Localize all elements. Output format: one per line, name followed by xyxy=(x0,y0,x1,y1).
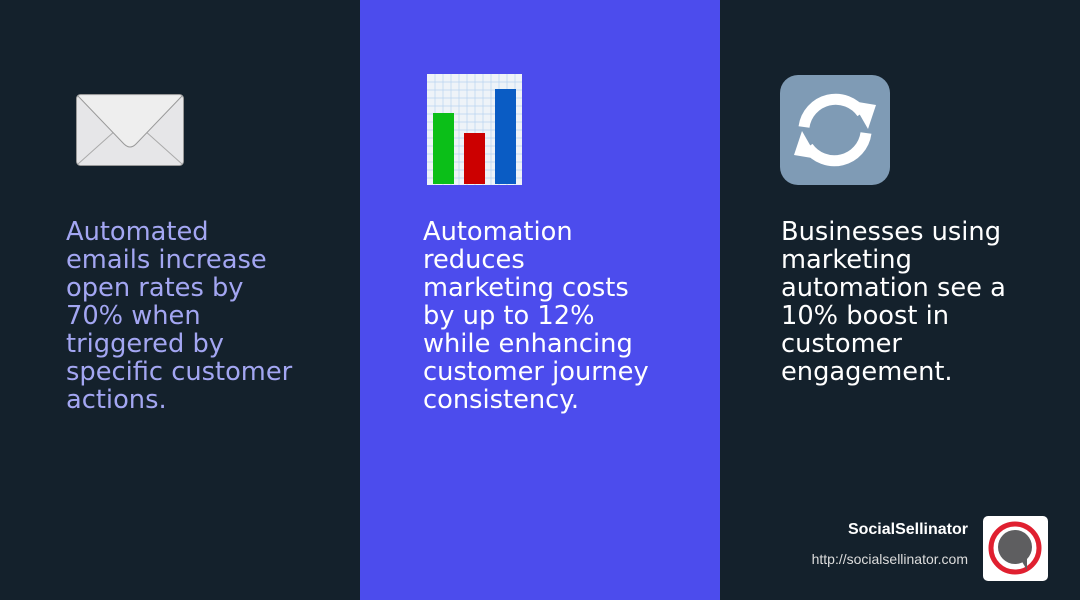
brand url: http://socialsellinator.com xyxy=(812,551,968,567)
brand name: SocialSellinator xyxy=(848,521,968,538)
text: email stat: Automated xyxy=(66,217,209,247)
text: email stat: open rates by xyxy=(66,273,244,303)
panel: reduces costs xyxy=(360,0,720,600)
text: email stat xyxy=(66,217,292,415)
icon: refresh arrows xyxy=(780,75,890,185)
text: cost stat xyxy=(423,217,649,415)
panel: automated emails xyxy=(0,0,360,600)
text: engagement stat xyxy=(781,217,1006,387)
text: engagement stat: engagement. xyxy=(781,357,953,387)
icon: envelope xyxy=(76,94,184,166)
text: cost stat: Automation xyxy=(423,217,573,247)
text: engagement stat: automation see a xyxy=(781,273,1006,303)
text: cost stat: marketing costs xyxy=(423,273,629,303)
text: email stat: specific customer xyxy=(66,357,292,387)
text: email stat: actions. xyxy=(66,385,167,415)
text: cost stat: while enhancing xyxy=(423,329,633,359)
text: email stat: triggered by xyxy=(66,329,224,359)
text: cost stat: consistency. xyxy=(423,385,579,415)
text: cost stat: reduces xyxy=(423,245,525,275)
text: cost stat: customer journey xyxy=(423,357,649,387)
text: email stat: emails increase xyxy=(66,245,267,275)
text: email stat: 70% when xyxy=(66,301,201,331)
text: cost stat: by up to 12% xyxy=(423,301,594,331)
text: engagement stat: customer xyxy=(781,329,902,359)
icon: bar chart xyxy=(427,74,522,185)
text: engagement stat: 10% boost in xyxy=(781,301,949,331)
brand footer xyxy=(812,516,1048,581)
panel: engagement xyxy=(720,0,1080,600)
text: engagement stat: marketing xyxy=(781,245,912,275)
logo xyxy=(983,516,1048,581)
text: engagement stat: Businesses using xyxy=(781,217,1001,247)
